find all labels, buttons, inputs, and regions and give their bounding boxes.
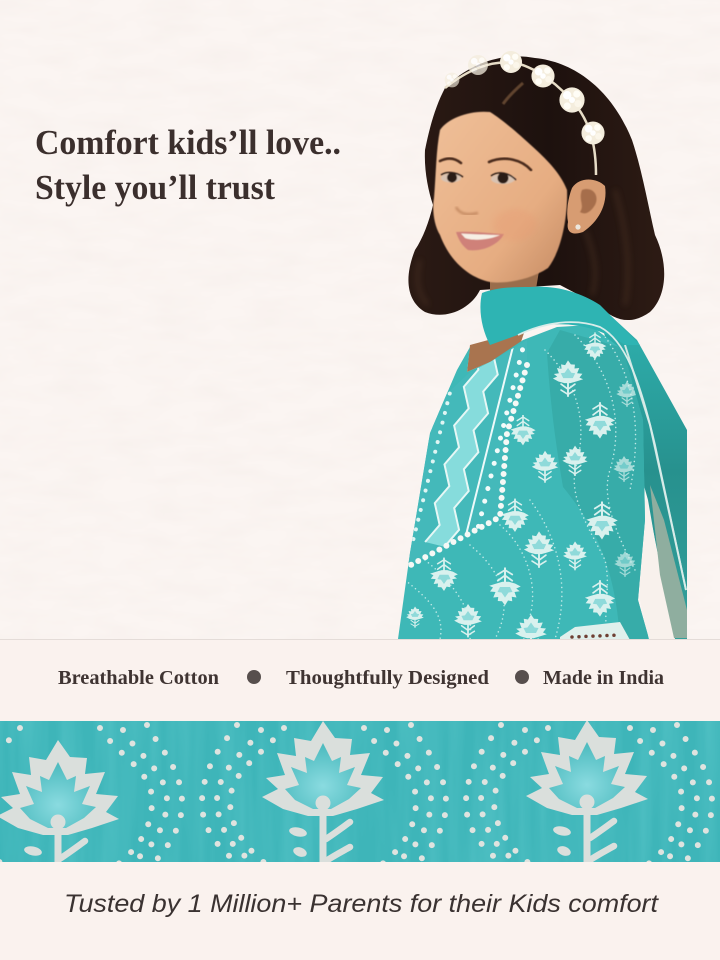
eyes bbox=[441, 172, 516, 184]
heading: Style you’ll trust bbox=[35, 168, 275, 207]
trust tagline: Tusted by 1 Million+ Parents for their Kids comfort bbox=[64, 890, 659, 918]
hair bbox=[408, 56, 664, 320]
feature list bbox=[58, 667, 664, 689]
mouth bbox=[456, 232, 504, 250]
hero paper texture panel bbox=[0, 0, 720, 639]
cheek blush bbox=[493, 209, 537, 241]
kurta motifs bbox=[406, 332, 638, 652]
earring bbox=[575, 224, 581, 230]
hair shine bbox=[418, 190, 628, 305]
eyebrows bbox=[440, 159, 531, 170]
neckline skin bbox=[467, 330, 525, 372]
kurta body bbox=[398, 326, 649, 639]
divider and feature strip bbox=[0, 639, 720, 721]
heading bbox=[35, 123, 341, 207]
heading: Comfort kids’ll love.. bbox=[35, 123, 341, 162]
kurta shaded sleeve bbox=[547, 330, 648, 639]
headband bbox=[445, 51, 605, 175]
dupatta lace edge bbox=[518, 322, 686, 590]
ear bbox=[567, 180, 606, 234]
feature: made in india: Made in India bbox=[543, 667, 664, 689]
feature: breathable cotton: Breathable Cotton bbox=[58, 667, 219, 689]
hair parting bbox=[503, 83, 523, 104]
bullet bbox=[247, 670, 261, 684]
girl figure bbox=[374, 51, 687, 653]
neck bbox=[490, 265, 540, 300]
fabric print banner bbox=[0, 721, 720, 862]
dupatta neck wrap bbox=[480, 287, 640, 345]
feature: thoughtfully designed: Thoughtfully Designed bbox=[286, 667, 489, 689]
sleeve cuff lace bbox=[560, 622, 630, 640]
nose shadow bbox=[456, 207, 478, 214]
kurta lace trim bbox=[407, 365, 527, 567]
ear inner shadow bbox=[580, 189, 597, 213]
kurta yoke panel bbox=[408, 347, 525, 566]
face bbox=[433, 112, 567, 282]
dupatta back drape bbox=[597, 303, 687, 639]
bullet bbox=[515, 670, 529, 684]
kurta dotted waves bbox=[405, 330, 636, 639]
